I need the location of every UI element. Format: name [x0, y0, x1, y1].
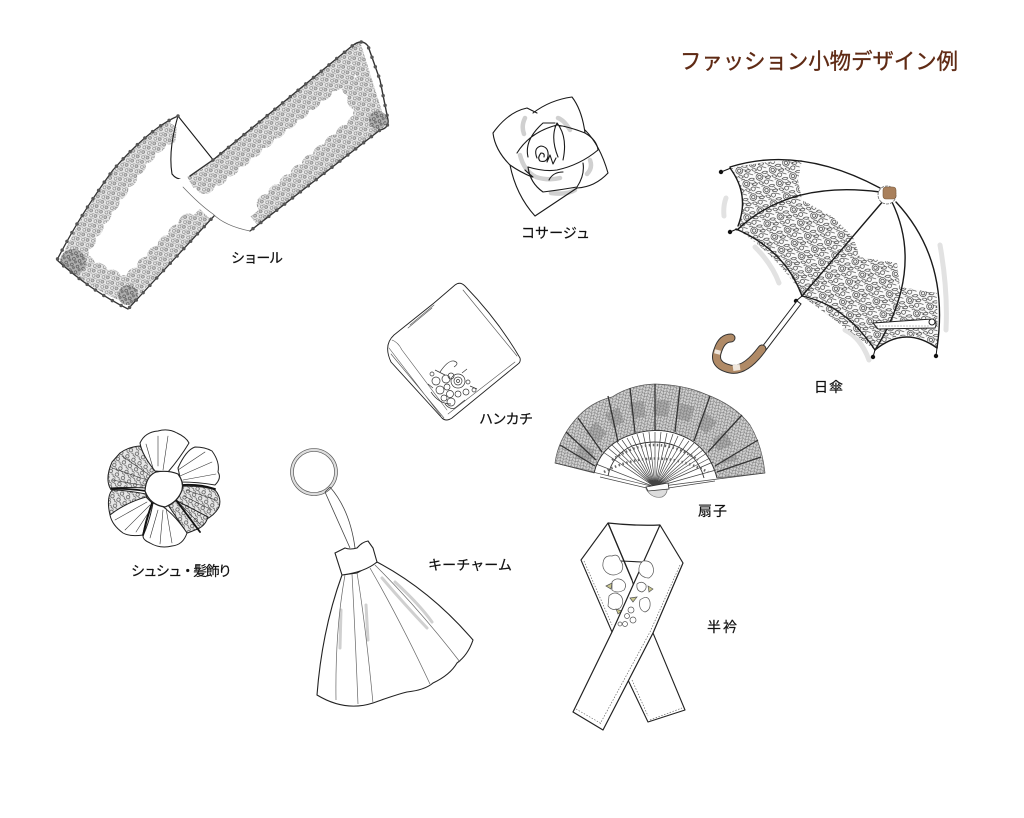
parasol strap	[873, 319, 936, 329]
scrunchie lace petals	[108, 446, 220, 533]
label: scrunchie: シュシュ・髪飾り	[131, 563, 232, 579]
collar stitching	[576, 565, 682, 724]
parasol lace canopy	[731, 160, 938, 350]
handkerchief embroidery	[428, 361, 477, 408]
label: corsage: コサージュ	[521, 225, 590, 241]
label: handkerchief: ハンカチ	[479, 411, 533, 427]
parasol ribs	[730, 160, 940, 350]
fan upper guard lines	[560, 384, 761, 472]
collar embroidery left	[603, 555, 626, 614]
label: half collar: 半衿	[707, 619, 737, 635]
shawl fold	[171, 116, 214, 179]
illustration: shawl	[57, 42, 388, 309]
title: ファッション小物デザイン例	[680, 49, 958, 74]
key ring	[292, 450, 336, 494]
charm dress shading	[340, 578, 432, 648]
corsage inner petals	[517, 123, 598, 192]
fan stick carving	[604, 445, 708, 472]
fan lace shading	[583, 408, 730, 462]
parasol top ferrule	[878, 186, 896, 204]
charm dress bodice	[335, 541, 377, 575]
fan inner arcs	[594, 430, 717, 478]
charm dress pleats	[336, 565, 460, 704]
illustration: corsage	[493, 97, 608, 216]
corsage shadows	[520, 118, 591, 194]
collar left stitching	[584, 561, 612, 625]
illustration: half collar	[573, 523, 685, 730]
collar top edge	[608, 523, 660, 580]
illustration: scrunchie	[108, 430, 220, 547]
collar back line	[621, 561, 642, 562]
shawl left panel	[57, 116, 214, 309]
charm dress skirt	[317, 562, 473, 706]
parasol rib tips	[719, 168, 938, 359]
fan lace leaf	[555, 384, 765, 478]
fan tassel	[646, 483, 669, 497]
illustration: key charm	[292, 450, 473, 706]
handkerchief folds	[389, 290, 517, 418]
back strip lower	[628, 625, 685, 722]
scrunchie gathers	[112, 436, 216, 544]
label: parasol: 日傘	[814, 379, 843, 395]
charm strap	[325, 487, 355, 548]
label: key charm: キーチャーム	[428, 557, 512, 573]
shawl right panel	[172, 42, 388, 231]
scrunchie center hole	[145, 471, 182, 507]
collar left panel	[581, 523, 650, 638]
label: shawl: ショール	[231, 250, 283, 266]
parasol shaft	[762, 301, 801, 350]
illustration: handkerchief	[388, 283, 520, 420]
corsage center	[536, 146, 556, 164]
collar right panel	[573, 525, 683, 730]
parasol handle	[716, 338, 762, 369]
shawl scalloped edges	[57, 42, 388, 309]
illustration: folding fan	[555, 384, 765, 497]
fan sticks	[555, 432, 765, 490]
handkerchief body	[388, 283, 520, 420]
scrunchie plain petals	[110, 430, 219, 547]
parasol shadows	[724, 198, 946, 360]
scrunchie heavy creases	[111, 485, 215, 535]
corsage outer petals	[493, 97, 608, 216]
illustration: parasol	[716, 160, 946, 369]
label: folding fan: 扇子	[698, 503, 727, 519]
collar embroidery right	[618, 561, 654, 626]
